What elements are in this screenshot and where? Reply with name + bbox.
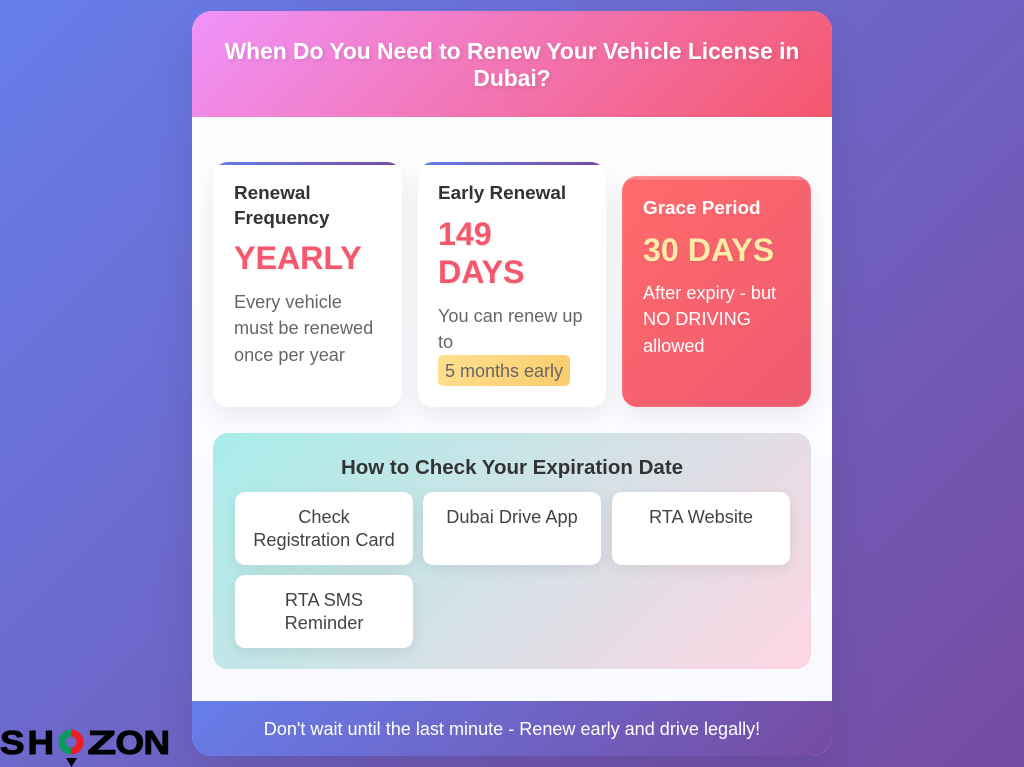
heading: early renewal: Early Renewal — [438, 183, 566, 204]
logo wordmark right: ON — [116, 725, 170, 762]
option: rta sms reminder: Reminder — [285, 613, 363, 633]
option: rta sms reminder — [235, 575, 413, 648]
description: grace period: After expiry - but — [643, 283, 776, 303]
value: 30 days: 30 DAYS — [643, 232, 774, 268]
panel: early renewal — [418, 162, 606, 407]
description: renewal frequency: once per year — [234, 345, 345, 365]
option: registration card: Registration Card — [253, 530, 395, 550]
value: 149 days — [438, 216, 524, 290]
panel: grace period — [622, 176, 811, 407]
description: grace period: NO DRIVING — [643, 309, 751, 329]
heading: renewal frequency: Renewal — [234, 183, 311, 204]
logo pointer — [66, 758, 77, 767]
description: grace period — [643, 283, 776, 356]
option: registration card: Check — [298, 507, 350, 527]
description: early renewal: to — [438, 332, 453, 352]
description: early renewal: You can renew up — [438, 306, 583, 326]
heading: how to check: How to Check Your Expiration Date — [341, 456, 683, 479]
heading: grace period: Grace Period — [643, 198, 761, 219]
logo wordmark left: SH — [0, 725, 54, 762]
option: registration card — [235, 492, 413, 565]
logo: shozon — [0, 725, 170, 767]
description: renewal frequency: must be renewed — [234, 318, 373, 338]
description: renewal frequency — [234, 292, 373, 365]
main card — [192, 11, 832, 756]
highlight: 5 months early: 5 months early — [445, 361, 563, 381]
option: dubai drive app: Dubai Drive App — [446, 507, 578, 527]
panel: renewal frequency — [213, 162, 402, 407]
description: early renewal — [438, 306, 583, 352]
value: 149 days: DAYS — [438, 254, 524, 290]
header banner — [192, 11, 832, 117]
description: grace period: allowed — [643, 336, 705, 356]
logo ring — [62, 733, 80, 751]
highlight: 5 months early — [438, 355, 570, 386]
option: rta website — [612, 492, 790, 565]
option: rta website: RTA Website — [649, 507, 753, 527]
heading: renewal frequency — [234, 183, 330, 229]
description: renewal frequency: Every vehicle — [234, 292, 342, 312]
panel: how to check — [213, 433, 811, 669]
value: yearly: YEARLY — [234, 240, 362, 276]
value: 149 days: 149 — [438, 216, 492, 252]
title: When Do You Need to Renew Your Vehicle License in Dubai? — [225, 38, 799, 91]
footer banner — [192, 701, 832, 756]
option: rta sms reminder: RTA SMS — [285, 590, 363, 610]
option: dubai drive app — [423, 492, 601, 565]
footer banner: Don't wait until the last minute - Renew early and drive legally! — [264, 719, 760, 739]
heading: renewal frequency: Frequency — [234, 208, 330, 229]
